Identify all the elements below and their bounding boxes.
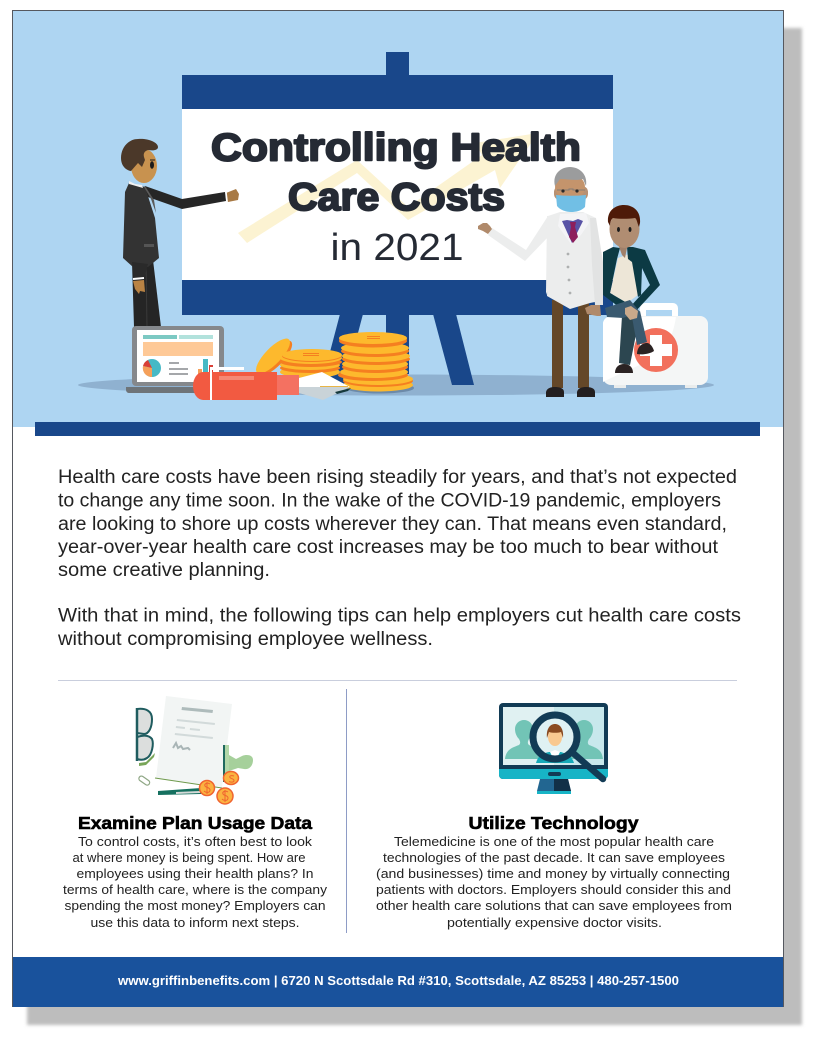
body text: terms of health care, where is the company [63,882,328,897]
figure: businessman [121,139,239,327]
icon: first aid case [603,303,708,388]
intro text: some creative planning. [58,560,270,581]
icon: documents, glasses, stamp and coins [137,696,253,804]
heading: Examine Plan Usage Data [78,813,312,833]
body text: technologies of the past decade. It can save employees [383,850,726,865]
icon: monitor with magnifying glass [499,703,608,794]
body text: other health care solutions that can save employees from [376,898,732,913]
body text [376,834,732,930]
body text: Telemedicine is one of the most popular health care [394,834,714,849]
intro text [57,467,741,650]
bottom hero bar [35,422,760,436]
figure: young man [603,205,660,373]
body text: To control costs, it’s often best to look [78,834,313,849]
body text: at where money is being spent. How are [72,850,306,865]
intro text: Health care costs have been rising steadily for years, and that’s not expected [58,467,737,488]
footer [13,957,783,1007]
body text: (and businesses) time and money by virtually connecting [376,866,730,881]
floor shadow [78,374,714,396]
intro text: year-over-year health care cost increases may be too much to bear without [58,537,719,558]
title: Controlling Health [211,126,581,170]
title [211,126,581,269]
title: Care Costs [288,176,505,219]
panel: examine plan usage data [63,696,328,930]
intro text: to change any time soon. In the wake of the COVID-19 pandemic, employers [58,490,721,512]
figure: doctor [478,167,603,397]
icon: coin stacks [251,332,414,394]
body text: patients with doctors. Employers should consider this and [376,882,731,897]
intro text: without compromising employee wellness. [57,629,433,650]
body text [63,834,328,930]
footer: www.griffinbenefits.com | 6720 N Scottsdale Rd #310, Scottsdale, AZ 85253 | 480-257-1500 [117,973,679,988]
intro text: With that in mind, the following tips can help employers cut health care costs [58,606,741,626]
presentation board [182,52,613,386]
body text: use this data to inform next steps. [90,915,300,930]
body text: potentially expensive doctor visits. [447,915,662,930]
intro text: are looking to shore up costs wherever they can. That means even standard, [58,514,727,535]
panel: utilize technology [376,703,732,930]
icon: red pen [193,367,351,400]
hero background [13,11,783,427]
body text: employees using their health plans? In [76,866,314,881]
body text: spending the most money? Employers can [64,898,326,913]
panel: hero illustration [13,11,783,436]
icon: laptop [126,326,226,393]
heading: Utilize Technology [468,813,639,833]
title: in 2021 [330,227,464,269]
